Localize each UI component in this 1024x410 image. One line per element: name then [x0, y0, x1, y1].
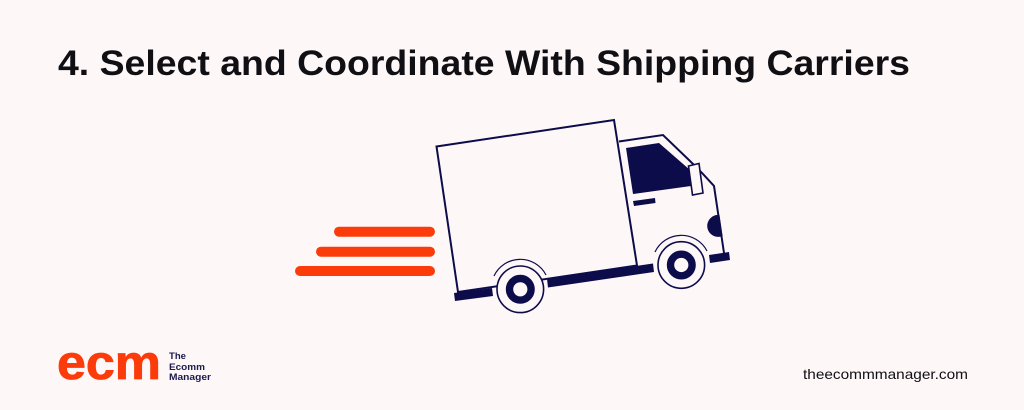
chassis	[454, 252, 730, 301]
truck cab outline	[619, 135, 724, 253]
front wheel	[655, 235, 707, 288]
icon: delivery truck	[436, 120, 730, 313]
rear wheel	[494, 259, 546, 313]
door handle	[633, 198, 656, 206]
logo wordmark	[169, 351, 211, 383]
logo wordmark: The	[169, 351, 186, 362]
logo	[57, 337, 211, 390]
side mirror	[688, 164, 703, 195]
headlight	[707, 215, 723, 237]
logo wordmark: Ecomm	[169, 362, 205, 373]
website url: theecommmanager.com	[803, 366, 968, 382]
cab window	[626, 143, 691, 194]
truck cargo box	[436, 120, 637, 292]
speed lines	[295, 227, 435, 276]
title: 4. Select and Coordinate With Shipping Carriers	[58, 44, 910, 83]
logo mark: ecm	[57, 337, 161, 390]
logo wordmark: Manager	[169, 372, 211, 383]
